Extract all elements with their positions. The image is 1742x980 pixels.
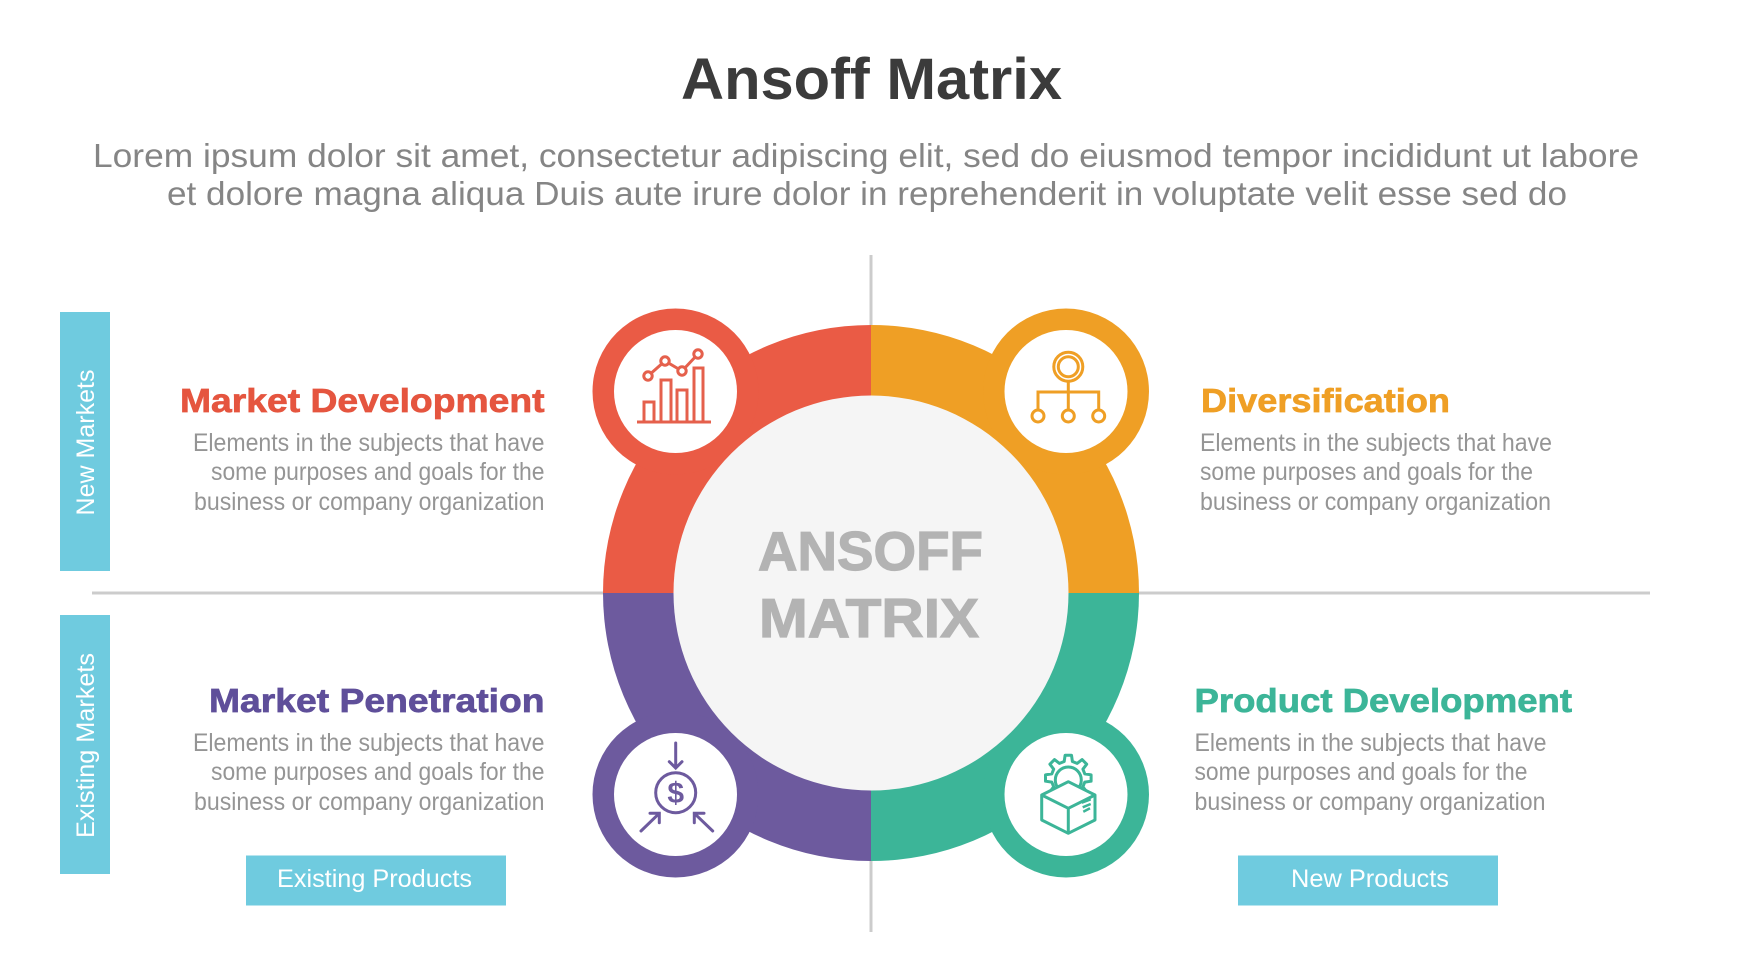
icon: dollar with converging arrows (614, 733, 737, 856)
icon: bar chart with trend line (614, 330, 737, 453)
axis label: existing products (246, 856, 506, 906)
center circle with label: MATRIX (759, 587, 979, 649)
heading: market development: Market Development (180, 382, 545, 419)
panel: market penetration text: Elements in the subjects that have (193, 729, 544, 757)
axis label: new markets: New Markets (72, 370, 100, 516)
panel: market development text: business or company organization (194, 488, 544, 516)
ring quadrant: market penetration (592, 593, 871, 878)
axis label: new markets (60, 312, 110, 571)
circular matrix diagram (592, 308, 1149, 878)
axis label: new products: New Products (1291, 865, 1449, 893)
panel: market penetration text: business or company organization (194, 788, 544, 816)
panel: market development text: some purposes and goals for the (211, 458, 544, 486)
ring quadrant: product development (871, 593, 1149, 878)
title: Ansoff Matrix (681, 47, 1062, 112)
panel: diversification text: business or company organization (1200, 488, 1551, 516)
subtitle text: et dolore magna aliqua Duis aute irure dolor in reprehenderit in voluptate velit esse sed do (167, 175, 1567, 212)
ring quadrant: diversification (871, 308, 1149, 593)
panel: product development text: business or company organization (1194, 788, 1546, 816)
heading: diversification: Diversification (1201, 382, 1450, 419)
center circle with label: ANSOFF (758, 520, 983, 582)
panel: market development text: Elements in the subjects that have (193, 429, 544, 457)
panel: market development text (180, 382, 545, 516)
panel: market penetration text: some purposes and goals for the (211, 758, 544, 786)
ring quadrant: market development (592, 308, 871, 593)
heading: market penetration: Market Penetration (209, 682, 544, 719)
axis label: new products (1238, 856, 1498, 906)
icon: hierarchy network (1004, 330, 1128, 453)
axis label: existing products: Existing Products (277, 865, 472, 893)
panel: product development text (1194, 682, 1572, 816)
center circle with label (674, 396, 1068, 790)
icon: box with gear (1004, 733, 1128, 856)
axis label: existing markets (60, 615, 110, 874)
subtitle text: Lorem ipsum dolor sit amet, consectetur adipiscing elit, sed do eiusmod tempor incididunt ut labore (93, 137, 1639, 174)
axis label: existing markets: Existing Markets (72, 653, 100, 838)
panel: diversification text: Elements in the subjects that have (1200, 429, 1552, 457)
subtitle text (93, 137, 1639, 212)
icon: dollar with converging arrows: $ (667, 777, 684, 810)
panel: product development text: Elements in the subjects that have (1194, 729, 1546, 757)
panel: diversification text (1200, 382, 1552, 516)
panel: product development text: some purposes and goals for the (1194, 758, 1528, 786)
panel: diversification text: some purposes and goals for the (1200, 458, 1533, 486)
panel: market penetration text (193, 682, 544, 816)
heading: product development: Product Development (1194, 682, 1572, 719)
